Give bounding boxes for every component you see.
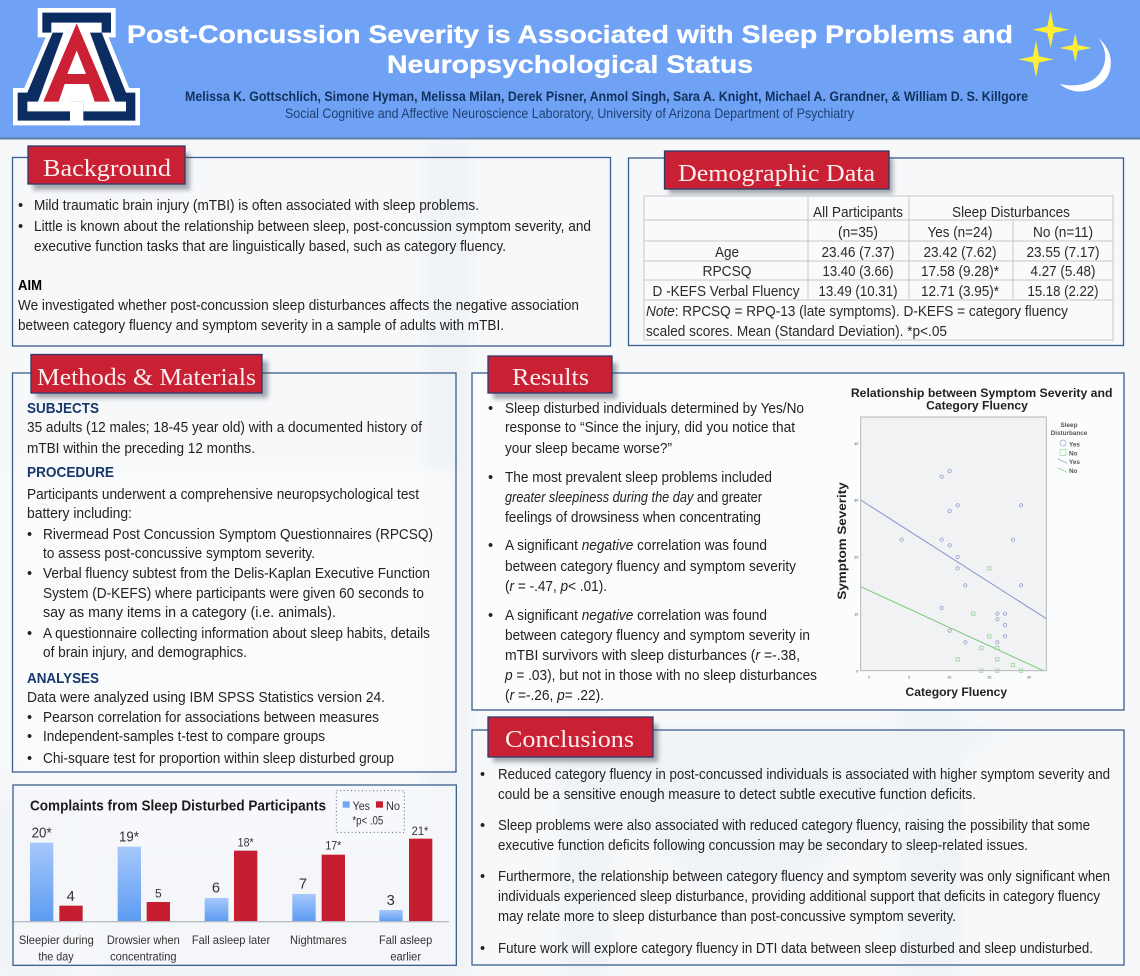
- text: procedure: say as many items in a category (i.e. animals).: [43, 605, 336, 621]
- text: results bullets: feelings of drowsiness when concentrating: [505, 510, 761, 526]
- table: demographics: 23.55 (7.17): [1026, 245, 1100, 261]
- scatter plot: [835, 386, 1112, 699]
- x axis ticks: [868, 676, 1031, 680]
- text: background bullets: [18, 198, 591, 255]
- text: analyses: ANALYSES: [27, 671, 99, 687]
- text: procedure: battery including:: [27, 506, 132, 522]
- text: results bullets: (r =-.26, p= .22).: [505, 688, 604, 704]
- category labels: the day: [38, 950, 74, 963]
- scatter title: Category Fluency: [926, 399, 1028, 413]
- bar value labels: 3: [387, 893, 395, 909]
- title: Neuropsychological Status: [387, 51, 753, 79]
- heading: background: Background: [43, 155, 171, 182]
- scatter legend: No: [1069, 451, 1078, 458]
- text: background bullets: Little is known about the relationship between sleep, post-concussion symptom severity, and: [34, 219, 591, 235]
- text: analyses: •: [27, 710, 32, 726]
- bar value labels: 7: [299, 877, 307, 893]
- text: procedure: to assess post-concussive symptom severity.: [43, 546, 315, 562]
- text: procedure: •: [27, 527, 32, 543]
- header banner: [0, 0, 1140, 140]
- category labels: Fall asleep later: [192, 934, 270, 947]
- scatter legend: Yes: [1069, 459, 1080, 466]
- text: conclusions bullets: •: [480, 818, 485, 834]
- text: results bullets: Sleep disturbed individuals determined by Yes/No: [505, 401, 804, 417]
- text: procedure: System (D-KEFS) where participants were given 60 seconds to: [43, 586, 424, 602]
- scatter legend: No: [1069, 468, 1078, 475]
- text: analyses: •: [27, 729, 32, 745]
- chart legend: *p< .05: [352, 813, 384, 827]
- panel: demographic data: [628, 151, 1124, 346]
- text: background bullets: •: [18, 219, 23, 235]
- panel: methods and materials: [12, 354, 456, 772]
- regression lines: [861, 500, 1046, 671]
- text: results bullets: •: [488, 401, 493, 417]
- text: analyses: Chi-square test for proportion within sleep disturbed group: [43, 751, 394, 767]
- table: demographics: Sleep Disturbances: [952, 205, 1070, 221]
- text: aim: [18, 278, 579, 334]
- table: demographics: 13.49 (10.31): [818, 284, 898, 300]
- text: subjects: [27, 401, 423, 457]
- table: demographics: scaled scores. Mean (Standard Deviation). *p<.05: [646, 324, 947, 340]
- text: results bullets: A significant negative correlation was found: [505, 538, 767, 554]
- text: conclusions bullets: [480, 767, 1110, 957]
- text: conclusions bullets: Future work will explore category fluency in DTI data between sleep disturbed and sleep undisturbed.: [498, 941, 1093, 957]
- y axis ticks: 40: [854, 442, 858, 446]
- scatter legend: [1051, 422, 1088, 475]
- text: analyses: [27, 671, 394, 767]
- text: background bullets: •: [18, 198, 23, 214]
- scatter legend: Sleep: [1061, 422, 1078, 429]
- table: demographics: All Participants: [813, 205, 903, 221]
- scatter legend: Disturbance: [1051, 430, 1088, 437]
- bar value labels: 17*: [325, 839, 342, 853]
- title: Post-Concussion Severity is Associated with Sleep Problems and: [127, 21, 1013, 49]
- authors: Melissa K. Gottschlich, Simone Hyman, Melissa Milan, Derek Pisner, Anmol Singh, Sara A. Knight, Michael A. Grandner, & William D. S. Killgore: [185, 89, 1028, 104]
- x axis ticks: 15: [987, 676, 991, 680]
- scatter legend: Yes: [1069, 442, 1080, 449]
- text: procedure: A questionnaire collecting information about sleep habits, details: [43, 626, 430, 642]
- text: conclusions bullets: Sleep problems were also associated with reduced category fluency, raising the possibility that some: [498, 818, 1090, 834]
- table: demographics: No (n=11): [1033, 225, 1093, 241]
- text: results bullets: •: [488, 608, 493, 624]
- panel: conclusions: [472, 717, 1124, 965]
- points: yes: [900, 469, 1023, 644]
- text: results bullets: [488, 401, 817, 704]
- table: demographics: 23.42 (7.62): [924, 245, 996, 261]
- heading: conclusions: Conclusions: [505, 726, 634, 753]
- text: procedure: •: [27, 626, 32, 642]
- table: demographics: 15.18 (2.22): [1028, 284, 1098, 300]
- table: demographics: RPCSQ: [702, 264, 752, 280]
- panel: background: [12, 146, 610, 346]
- text: procedure: Participants underwent a comprehensive neuropsychological test: [27, 487, 419, 503]
- text: procedure: PROCEDURE: [27, 465, 114, 481]
- heading: demographic data: [664, 151, 889, 189]
- bars: yes: [30, 843, 403, 922]
- y axis ticks: 30: [854, 499, 858, 503]
- bars: no: [59, 839, 432, 922]
- text: conclusions bullets: •: [480, 767, 485, 783]
- category labels: Fall asleep: [379, 934, 432, 947]
- affiliation: Social Cognitive and Affective Neuroscience Laboratory, University of Arizona Department of Psychiatry: [285, 106, 854, 121]
- text: procedure: of brain injury, and demographics.: [43, 645, 247, 661]
- text: subjects: SUBJECTS: [27, 401, 99, 417]
- scatter title: [851, 386, 1112, 413]
- text: results bullets: mTBI survivors with sleep disturbances (r =-.38,: [505, 648, 800, 664]
- text: subjects: mTBI within the preceding 12 months.: [27, 441, 255, 457]
- text: analyses: Data were analyzed using IBM SPSS Statistics version 24.: [27, 690, 385, 706]
- text: results bullets: A significant negative correlation was found: [505, 608, 767, 624]
- text: aim: between category fluency and symptom severity in a sample of adults with mTBI.: [18, 318, 504, 334]
- bar value labels: 21*: [412, 824, 429, 838]
- axis title: symptom severity: Symptom Severity: [835, 482, 849, 600]
- text: analyses: Independent-samples t-test to compare groups: [43, 729, 325, 745]
- bar value labels: [32, 824, 429, 909]
- table: demographics: (n=35): [838, 225, 878, 241]
- text: aim: AIM: [18, 278, 42, 294]
- category labels: earlier: [390, 950, 421, 963]
- bar value labels: 4: [67, 889, 75, 905]
- category labels: [19, 934, 432, 963]
- text: subjects: 35 adults (12 males; 18-45 year old) with a documented history of: [27, 420, 423, 436]
- panel: results: [472, 356, 1124, 710]
- text: procedure: [27, 465, 433, 661]
- heading: results: [488, 356, 612, 393]
- text: results bullets: response to “Since the injury, did you notice that: [505, 420, 795, 436]
- category labels: Nightmares: [290, 934, 347, 947]
- heading: conclusions: [488, 717, 653, 757]
- text: aim: We investigated whether post-concussion sleep disturbances affects the negative association: [18, 298, 579, 314]
- heading: background: [28, 146, 185, 184]
- text: conclusions bullets: executive function deficits following concussion may be secondary to sleep-related issues.: [498, 838, 1028, 854]
- x axis ticks: 5: [908, 676, 910, 680]
- axis title: category fluency: Category Fluency: [905, 685, 1008, 699]
- points: no: [956, 567, 1023, 672]
- chart legend: Yes: [353, 799, 370, 813]
- table: demographics: 13.40 (3.66): [822, 264, 894, 280]
- table: demographics: 12.71 (3.95)*: [921, 284, 999, 300]
- text: results bullets: •: [488, 470, 493, 486]
- text: results bullets: between category fluency and symptom severity: [505, 559, 797, 575]
- text: results bullets: between category fluency and symptom severity in: [505, 628, 810, 644]
- text: background bullets: executive function tasks that are linguistically based, such as category fluency.: [34, 239, 506, 255]
- y axis ticks: 20: [854, 556, 858, 560]
- table: demographics: [644, 196, 1113, 340]
- category labels: concentrating: [110, 950, 176, 963]
- text: conclusions bullets: individuals experienced sleep disturbance, providing additional support that deficits in category fluency: [498, 889, 1101, 905]
- bar value labels: 6: [212, 881, 220, 897]
- table: demographics: Note: RPCSQ = RPQ-13 (late symptoms). D-KEFS = category fluency: [646, 304, 1069, 320]
- text: results bullets: The most prevalent sleep problems included: [505, 470, 772, 486]
- text: results bullets: your sleep became worse?”: [505, 441, 672, 457]
- text: conclusions bullets: •: [480, 941, 485, 957]
- heading: results: Results: [512, 364, 589, 391]
- title: [127, 21, 1013, 79]
- scatter title: Relationship between Symptom Severity and: [851, 386, 1112, 400]
- table: demographics: Age: [715, 245, 739, 261]
- x axis ticks: 10: [947, 676, 951, 680]
- y axis ticks: 0: [856, 669, 858, 673]
- text: procedure: Rivermead Post Concussion Symptom Questionnaires (RPCSQ): [43, 527, 433, 543]
- text: conclusions bullets: may relate more to sleep disturbance than post-concussive symptom severity.: [498, 909, 956, 925]
- x axis ticks: 0: [868, 676, 870, 680]
- text: analyses: •: [27, 751, 32, 767]
- table: demographics: 4.27 (5.48): [1030, 264, 1096, 280]
- text: procedure: •: [27, 566, 32, 582]
- text: results bullets: •: [488, 538, 493, 554]
- bar value labels: 20*: [32, 825, 52, 841]
- text: conclusions bullets: could be a sensitive enough measure to detect subtle executive function deficits.: [498, 787, 976, 803]
- text: analyses: Pearson correlation for associations between measures: [43, 710, 379, 726]
- table: demographics: Yes (n=24): [928, 225, 992, 241]
- chart title: Complaints from Sleep Disturbed Participants: [30, 799, 326, 815]
- text: results bullets: p = .03), but not in those with no sleep disturbances: [504, 668, 817, 684]
- chart legend: No: [386, 799, 400, 813]
- y axis ticks: [854, 442, 858, 673]
- heading: methods and materials: Methods & Materials: [37, 364, 256, 391]
- table: demographics: D -KEFS Verbal Fluency: [652, 284, 800, 300]
- bar value labels: 19*: [119, 829, 139, 845]
- y axis ticks: 10: [854, 612, 858, 616]
- text: results bullets: (r = -.47, p< .01).: [505, 579, 607, 595]
- table: demographics: 17.58 (9.28)*: [921, 264, 999, 280]
- text: background bullets: Mild traumatic brain injury (mTBI) is often associated with sleep problems.: [34, 198, 479, 214]
- table: demographics: 23.46 (7.37): [822, 245, 894, 261]
- text: results bullets: greater sleepiness during the day and greater: [505, 490, 762, 506]
- bar value labels: 18*: [238, 835, 254, 849]
- heading: demographic data: Demographic Data: [678, 160, 875, 187]
- chart legend: [336, 791, 404, 832]
- bar value labels: 5: [155, 886, 162, 900]
- logo: block A: [18, 13, 135, 125]
- category labels: Sleepier during: [19, 934, 94, 947]
- icon: stars and moon: [1018, 11, 1111, 91]
- x axis ticks: 20: [1027, 676, 1031, 680]
- text: conclusions bullets: •: [480, 869, 485, 885]
- text: procedure: Verbal fluency subtest from the Delis-Kaplan Executive Function: [43, 566, 430, 582]
- heading: methods and materials: [31, 354, 262, 393]
- panel: complaints bar chart: [13, 785, 456, 965]
- category labels: Drowsier when: [107, 934, 180, 947]
